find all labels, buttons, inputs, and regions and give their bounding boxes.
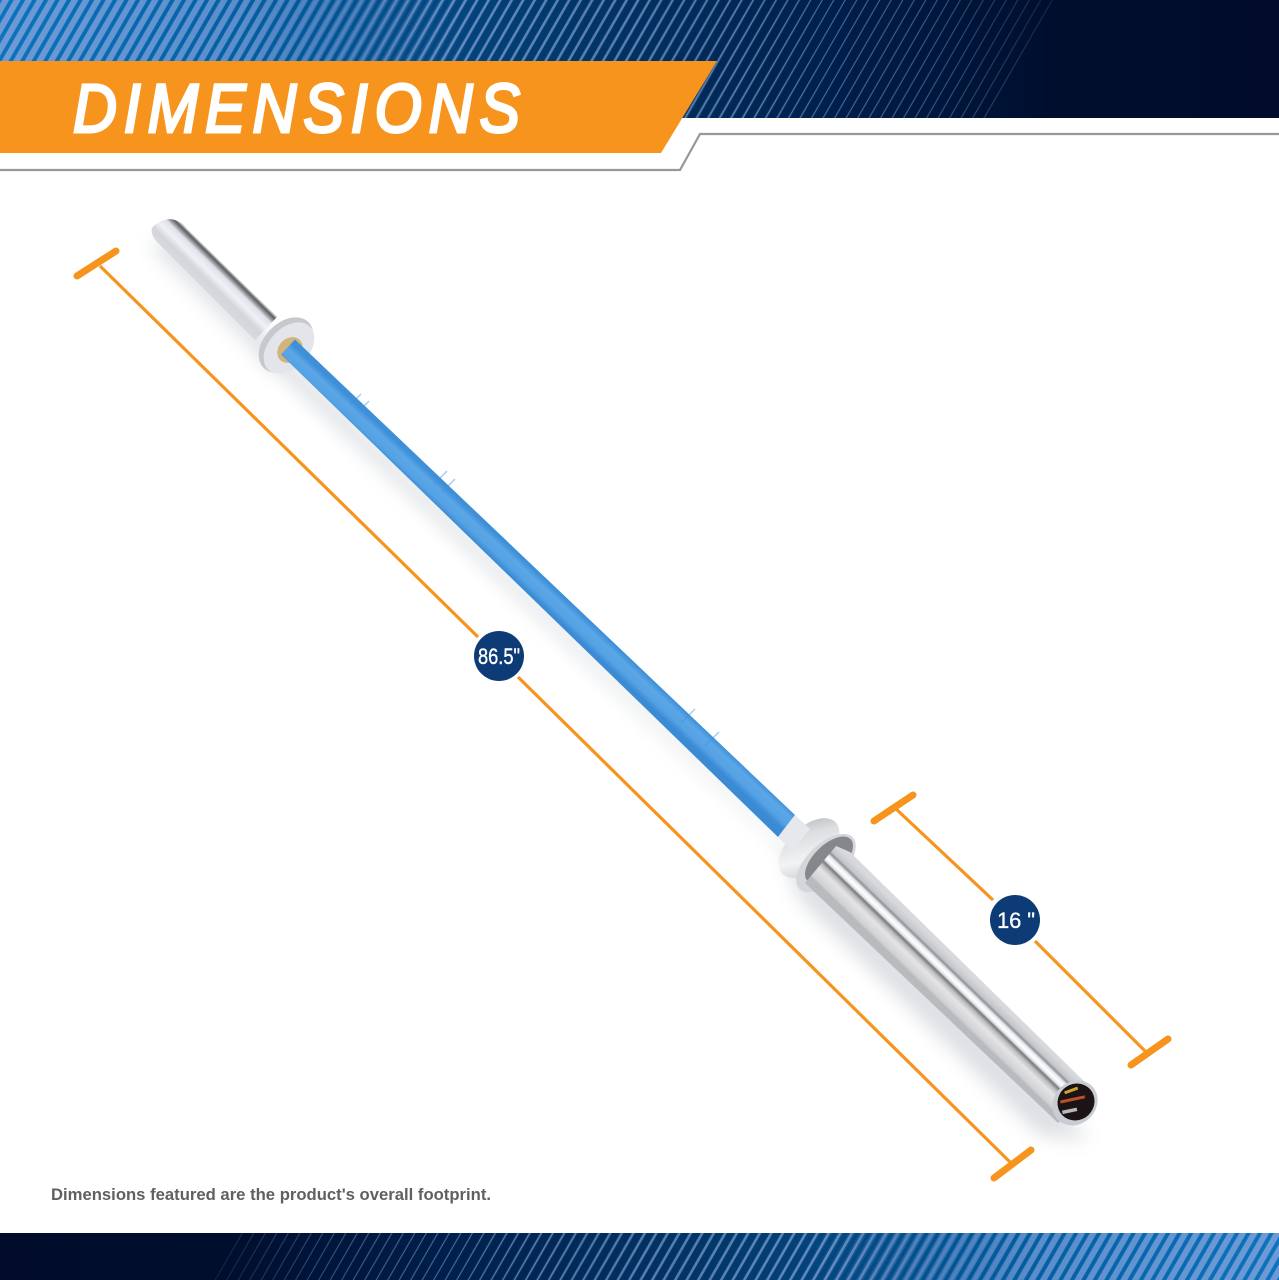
dimension line: overall length	[77, 251, 1031, 1178]
header outline rule	[0, 134, 1279, 170]
bar end cap	[1043, 1071, 1107, 1135]
footnote: Dimensions featured are the product's overall footprint.	[51, 1185, 491, 1204]
left sleeve	[152, 219, 324, 383]
badge: 16 inches: 16 "	[997, 908, 1035, 933]
front flange	[786, 824, 866, 902]
title: DIMENSIONS	[73, 69, 520, 147]
left collar	[248, 307, 324, 383]
barbell shadow	[150, 240, 1090, 1140]
right sleeve	[768, 807, 1107, 1135]
blue shaft	[281, 340, 795, 837]
badge: 86.5 inches: 86.5"	[478, 644, 520, 669]
neck and rear flange	[768, 807, 850, 889]
sleeve tube	[805, 846, 1093, 1123]
barbell	[150, 219, 1107, 1140]
footer band	[0, 1233, 1279, 1280]
bronze bushing	[272, 332, 308, 368]
title banner	[0, 61, 717, 153]
dimension line: sleeve length	[874, 795, 1168, 1065]
badge: 86.5 inches	[474, 631, 524, 681]
badge: 16 inches	[990, 895, 1040, 945]
header band	[0, 0, 1279, 118]
